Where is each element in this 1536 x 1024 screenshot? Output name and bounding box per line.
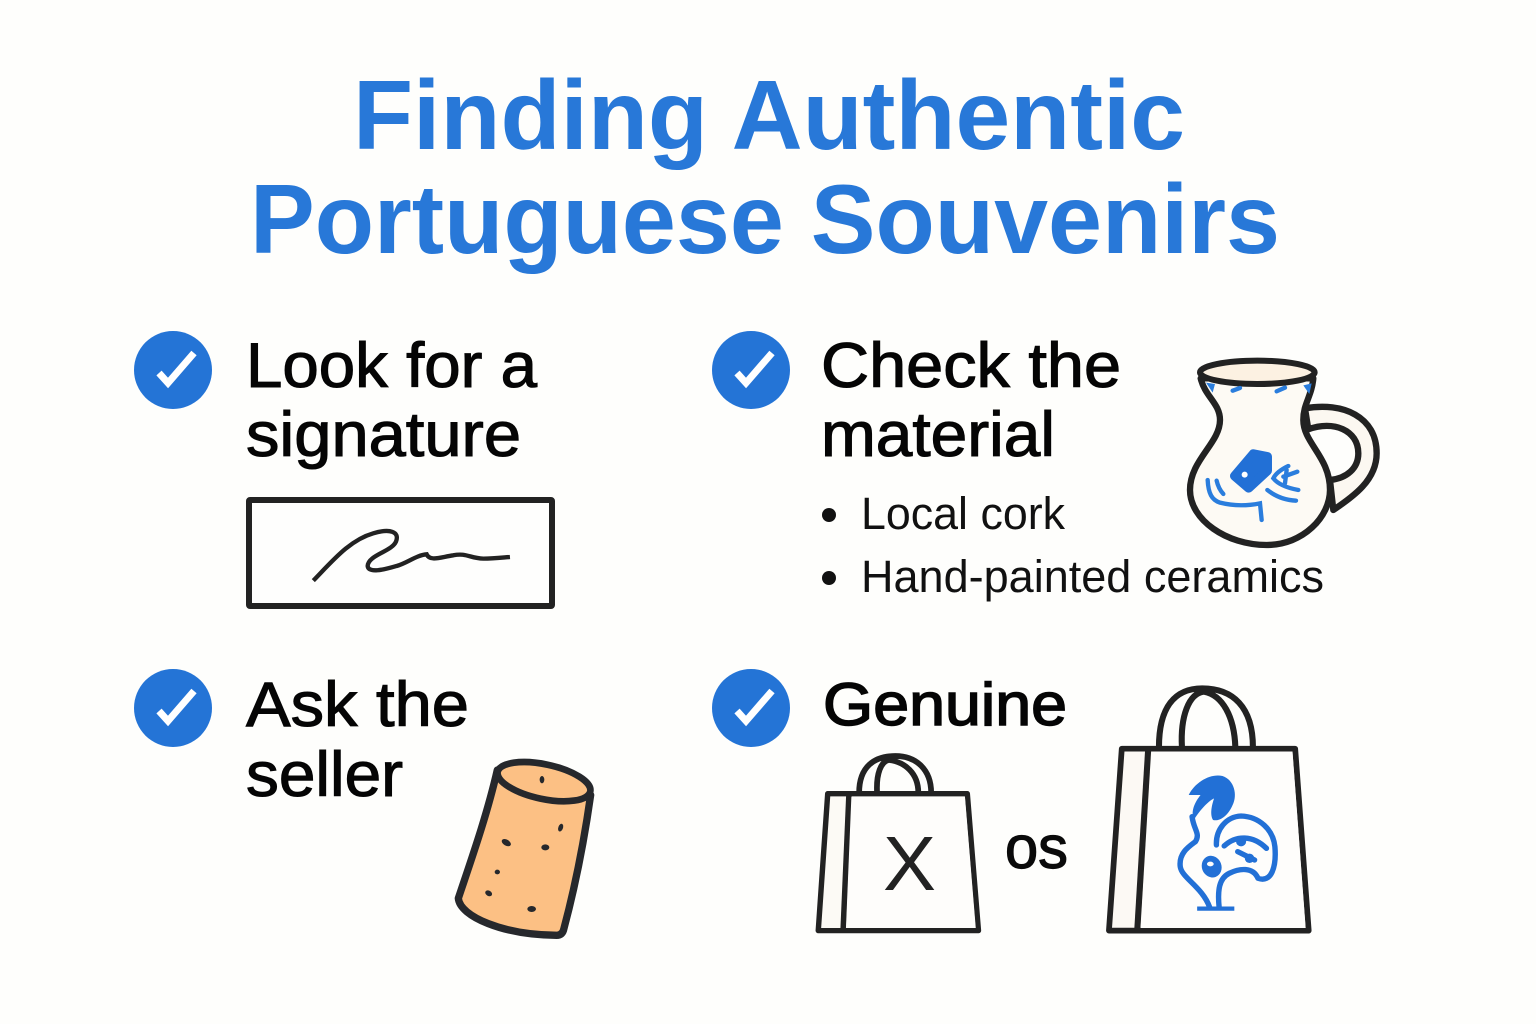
heading: ask the seller: Ask the [246,670,469,740]
title: Finding Authentic [353,60,1185,170]
label: os: os [1005,814,1068,881]
heading: ask the seller [246,670,469,810]
icon: painted ceramic jug [1190,361,1377,545]
heading: genuine: Genuine [823,671,1067,738]
icon: signature box [249,500,552,606]
icon: rooster [1180,775,1275,909]
icon: check badge [134,331,212,409]
heading: look for a signature [246,331,538,470]
panel: genuine [712,669,1309,931]
bullet list: materials: Hand-painted ceramics [861,551,1324,602]
icon: genuine bag with rooster [1109,688,1309,931]
panel: look for a signature [134,331,552,606]
heading: check the material [821,331,1121,470]
panel: check the material [712,331,1377,602]
icon: check badge [712,331,790,409]
icon: check badge [712,669,790,747]
icon: check badge [134,669,212,747]
heading: look for a signature: Look for a [246,331,538,401]
icon: fake bag: X [883,821,936,907]
heading: check the material: Check the [821,331,1121,401]
title [250,60,1280,274]
icon: fake bag [818,756,978,931]
heading: ask the seller: seller [246,740,403,810]
icon: cork [458,755,594,935]
heading: check the material: material [821,400,1055,470]
bullet list: materials [822,488,1324,602]
bullet list: materials: Local cork [861,488,1065,539]
heading: look for a signature: signature [246,400,521,470]
panel: ask the seller [134,669,594,935]
title: Portuguese Souvenirs [250,164,1280,274]
